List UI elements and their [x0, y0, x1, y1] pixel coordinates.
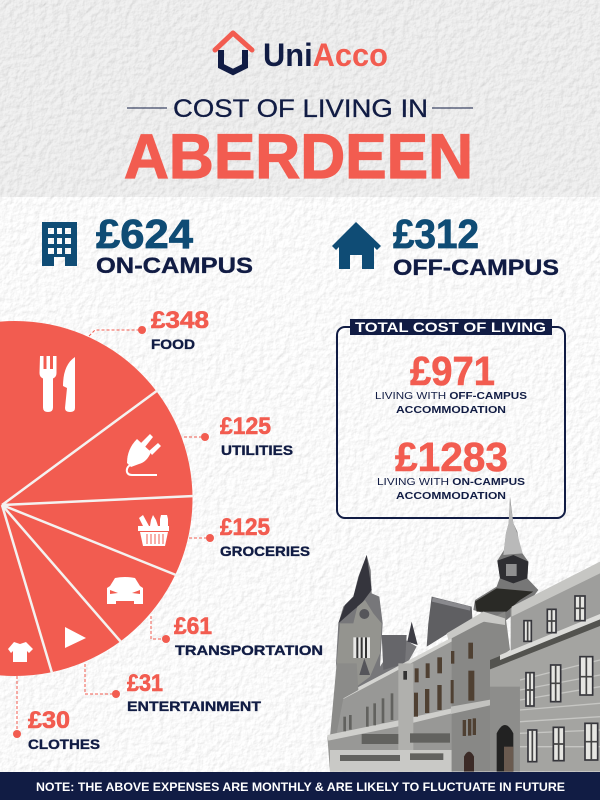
panel heading: TOTAL COST OF LIVING	[355, 319, 546, 335]
callout: clothes: CLOTHES	[28, 736, 100, 752]
on-campus amount: £624	[96, 211, 193, 257]
callout: entertainment: £31	[127, 670, 163, 697]
callout: transportation: TRANSPORTATION	[175, 642, 323, 658]
icon: office building	[42, 222, 77, 266]
callout: clothes: £30	[28, 707, 70, 734]
on-campus total	[377, 434, 525, 502]
icon: plug	[127, 434, 161, 475]
callout: food: FOOD	[151, 336, 195, 352]
left wing	[327, 638, 453, 772]
callout: groceries: GROCERIES	[220, 543, 310, 559]
off-campus total: £971	[410, 348, 495, 394]
callout: transportation	[151, 613, 323, 658]
icon: house	[332, 222, 381, 269]
arch doorway	[497, 725, 513, 772]
callout: food	[89, 307, 209, 352]
icon: t-shirt	[8, 642, 33, 662]
panel: off-campus cost	[332, 211, 559, 280]
icon: car	[107, 577, 143, 604]
logo wordmark: UniAcco	[263, 37, 388, 73]
icon: grocery basket	[138, 515, 169, 546]
off-campus total: ACCOMMODATION	[396, 405, 506, 416]
back block	[427, 597, 473, 647]
right wing	[490, 618, 600, 772]
on-campus label: ON-CAMPUS	[96, 253, 253, 278]
callout: groceries	[189, 514, 310, 559]
on-campus total: £1283	[395, 434, 508, 480]
callout: transportation: £61	[174, 613, 212, 640]
illustration: Aberdeen town house building	[327, 497, 600, 772]
callout: clothes	[13, 676, 100, 752]
title: Aberdeen: ABERDEEN	[124, 122, 473, 192]
callout: utilities	[184, 413, 293, 458]
windows	[524, 596, 598, 762]
callout: entertainment: ENTERTAINMENT	[127, 698, 262, 714]
on-campus total: ACCOMMODATION	[396, 491, 506, 502]
off-campus total: LIVING WITH OFF-CAMPUS	[375, 391, 527, 402]
icon: house logo	[215, 33, 252, 72]
panel: total cost of living	[337, 319, 565, 518]
footer note: NOTE: THE ABOVE EXPENSES ARE MONTHLY & ARE LIKELY TO FLUCTUATE IN FUTURE	[36, 780, 565, 794]
heading: cost of living in: COST OF LIVING IN	[173, 95, 428, 123]
left clock tower	[336, 555, 417, 703]
callout: utilities: UTILITIES	[221, 442, 293, 458]
callout: utilities: £125	[220, 413, 271, 440]
callout: groceries: £125	[220, 514, 270, 541]
icon: fork and knife	[40, 356, 75, 412]
on-campus total: LIVING WITH ON-CAMPUS	[377, 477, 525, 488]
off-campus amount: £312	[393, 211, 479, 257]
panel: on-campus cost	[42, 211, 253, 278]
icon: play	[65, 627, 86, 648]
off-campus label: OFF-CAMPUS	[393, 255, 559, 280]
callout: entertainment	[85, 664, 262, 714]
logo: UniAcco	[215, 33, 388, 73]
footer note	[0, 772, 600, 800]
pie chart: monthly expenses	[0, 321, 194, 676]
off-campus total	[375, 348, 527, 416]
callout: food: £348	[151, 307, 209, 334]
central section	[452, 612, 510, 772]
centre tower and spire	[473, 497, 538, 620]
